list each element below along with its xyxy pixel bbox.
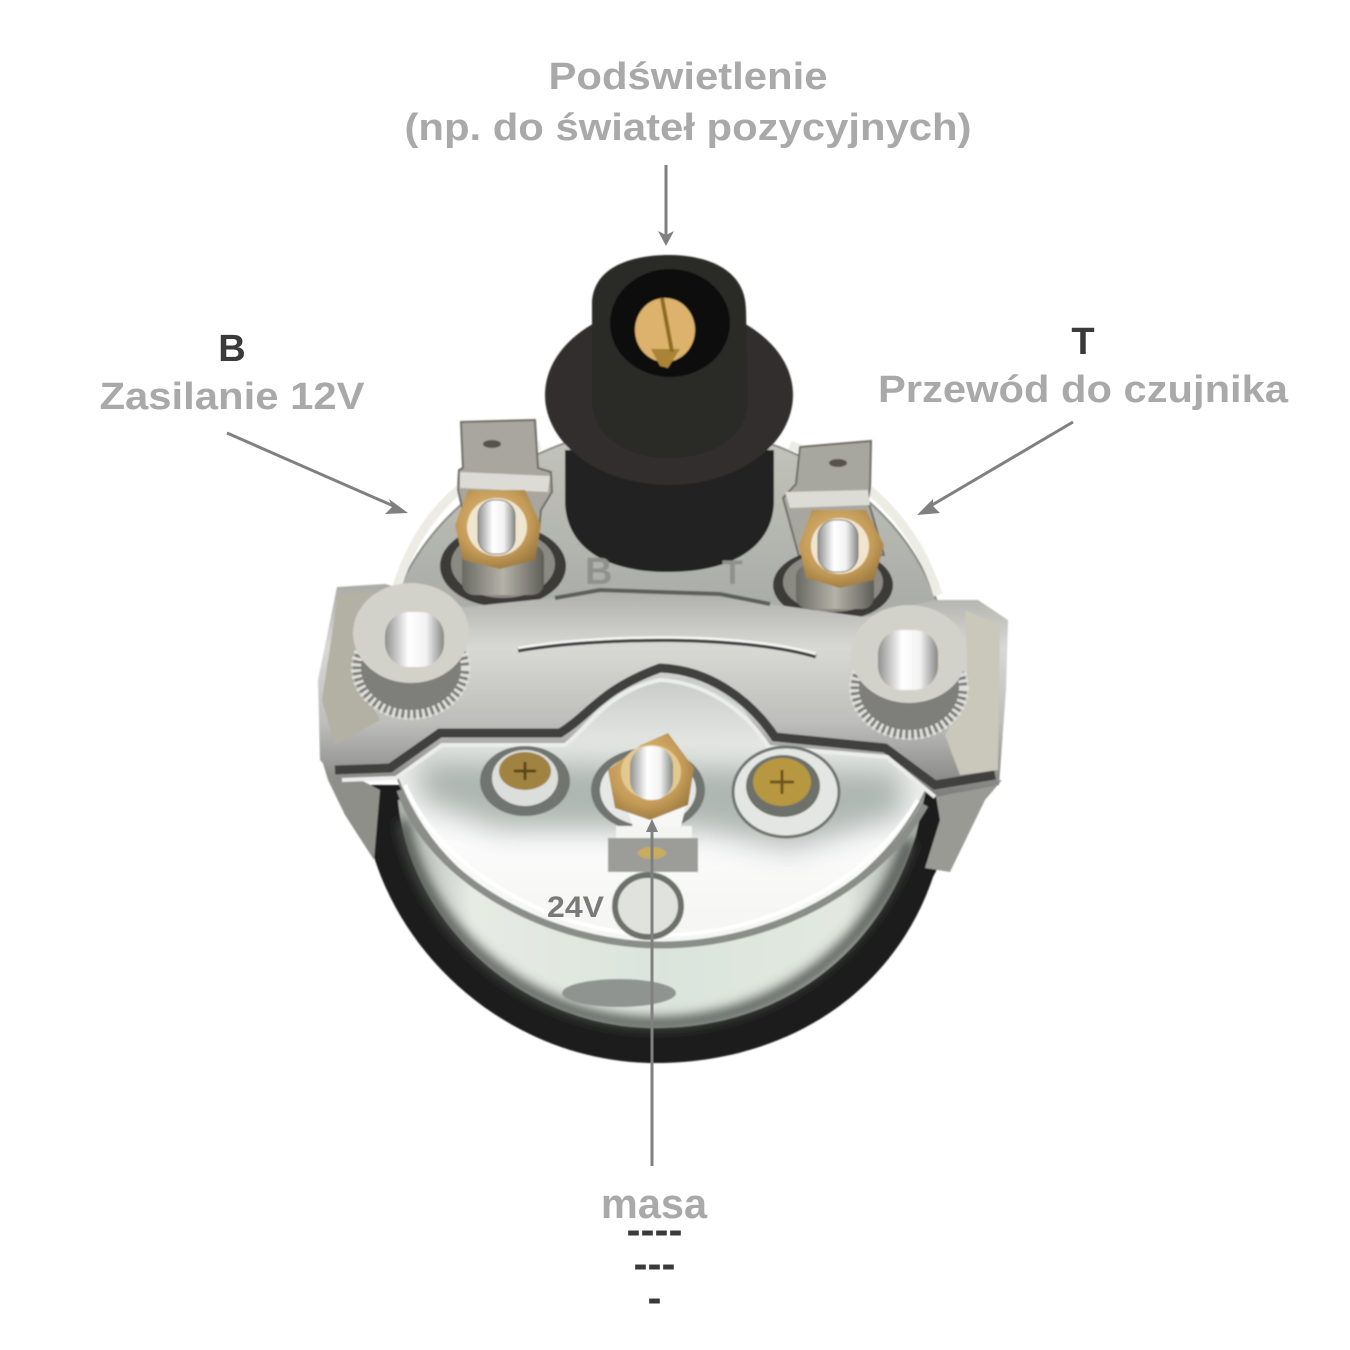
heading: backlight: (np. do świateł pozycyjnych) (404, 107, 972, 149)
maker logo (562, 979, 676, 1007)
stud T (773, 510, 893, 621)
socket flange (545, 305, 793, 485)
mounting bracket (318, 584, 1008, 797)
steel housing (398, 790, 926, 1028)
socket lower body (565, 450, 774, 572)
housing edge shadow (402, 820, 910, 1024)
label B: power: B (218, 328, 246, 370)
bracket ear right (925, 780, 1002, 872)
lower face rim (400, 790, 925, 945)
ground symbol: ---- (627, 1206, 682, 1253)
arrow: to terminal B (227, 433, 408, 514)
label T: sensor wire: T (1071, 321, 1095, 363)
label B: power: Zasilanie 12V (100, 376, 365, 418)
brass lamp contact (635, 298, 695, 362)
label: ground: masa (601, 1180, 708, 1227)
bracket ear left (322, 760, 380, 860)
arrow: to backlight socket (658, 165, 674, 246)
terminal tab T (783, 441, 884, 560)
centre ground stud (591, 733, 705, 937)
face shadow under bracket (420, 760, 905, 850)
stud B (440, 490, 566, 607)
label T: sensor wire (878, 321, 1289, 411)
housing back face (380, 425, 950, 947)
label: 24V: 24V (547, 891, 604, 924)
ground symbol (627, 1206, 682, 1321)
arrow: to ground stud (646, 819, 658, 1166)
embossed letters: B (585, 551, 612, 593)
ring eyelet (615, 875, 681, 937)
bracket crease (518, 639, 816, 656)
right screw (733, 747, 839, 837)
bracket end panel left (322, 590, 380, 745)
bracket folded lower edge (335, 668, 995, 785)
terminal tab B (458, 420, 552, 540)
label B: power (100, 328, 365, 418)
heading: backlight: Podświetlenie (548, 56, 828, 98)
dome rim highlight (396, 445, 938, 595)
heading: backlight (404, 56, 972, 149)
ground symbol: - (648, 1274, 662, 1321)
knurled nut left (353, 583, 469, 718)
ground symbol: --- (634, 1240, 675, 1287)
embossed letters (585, 551, 743, 593)
label T: sensor wire: Przewód do czujnika (878, 369, 1289, 411)
socket barrel (592, 255, 748, 458)
knurled nut right (851, 605, 967, 738)
black rubber rim (362, 785, 970, 1063)
arrow: to terminal T (917, 422, 1073, 515)
bracket end panel right (945, 610, 1000, 775)
plate ridge above bracket (555, 590, 770, 604)
left screw (480, 746, 570, 816)
rubber lamp socket (545, 255, 793, 572)
ground tab (608, 826, 698, 872)
socket opening (610, 269, 730, 377)
gauge photo (318, 255, 1008, 1063)
embossed letters: T (722, 554, 743, 592)
